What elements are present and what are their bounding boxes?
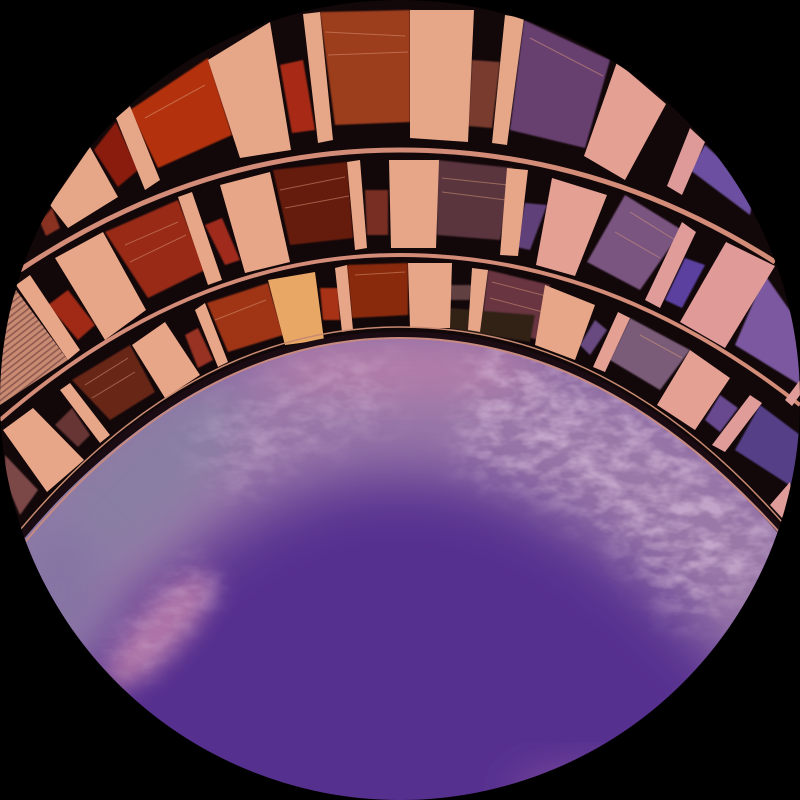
lower row windows xyxy=(5,263,800,515)
middle row panels xyxy=(16,160,775,360)
sky with clouds xyxy=(24,339,780,800)
lower beam xyxy=(0,255,800,420)
sky-edge arch xyxy=(20,327,782,542)
middle row windows xyxy=(48,160,800,385)
background: dark facade xyxy=(0,0,800,530)
upper row windows xyxy=(40,10,755,236)
slatted panel xyxy=(0,290,68,405)
upper row panels xyxy=(50,10,705,228)
lower row panels xyxy=(3,263,800,518)
upper beam xyxy=(20,150,775,270)
window reflection lines xyxy=(85,32,682,398)
